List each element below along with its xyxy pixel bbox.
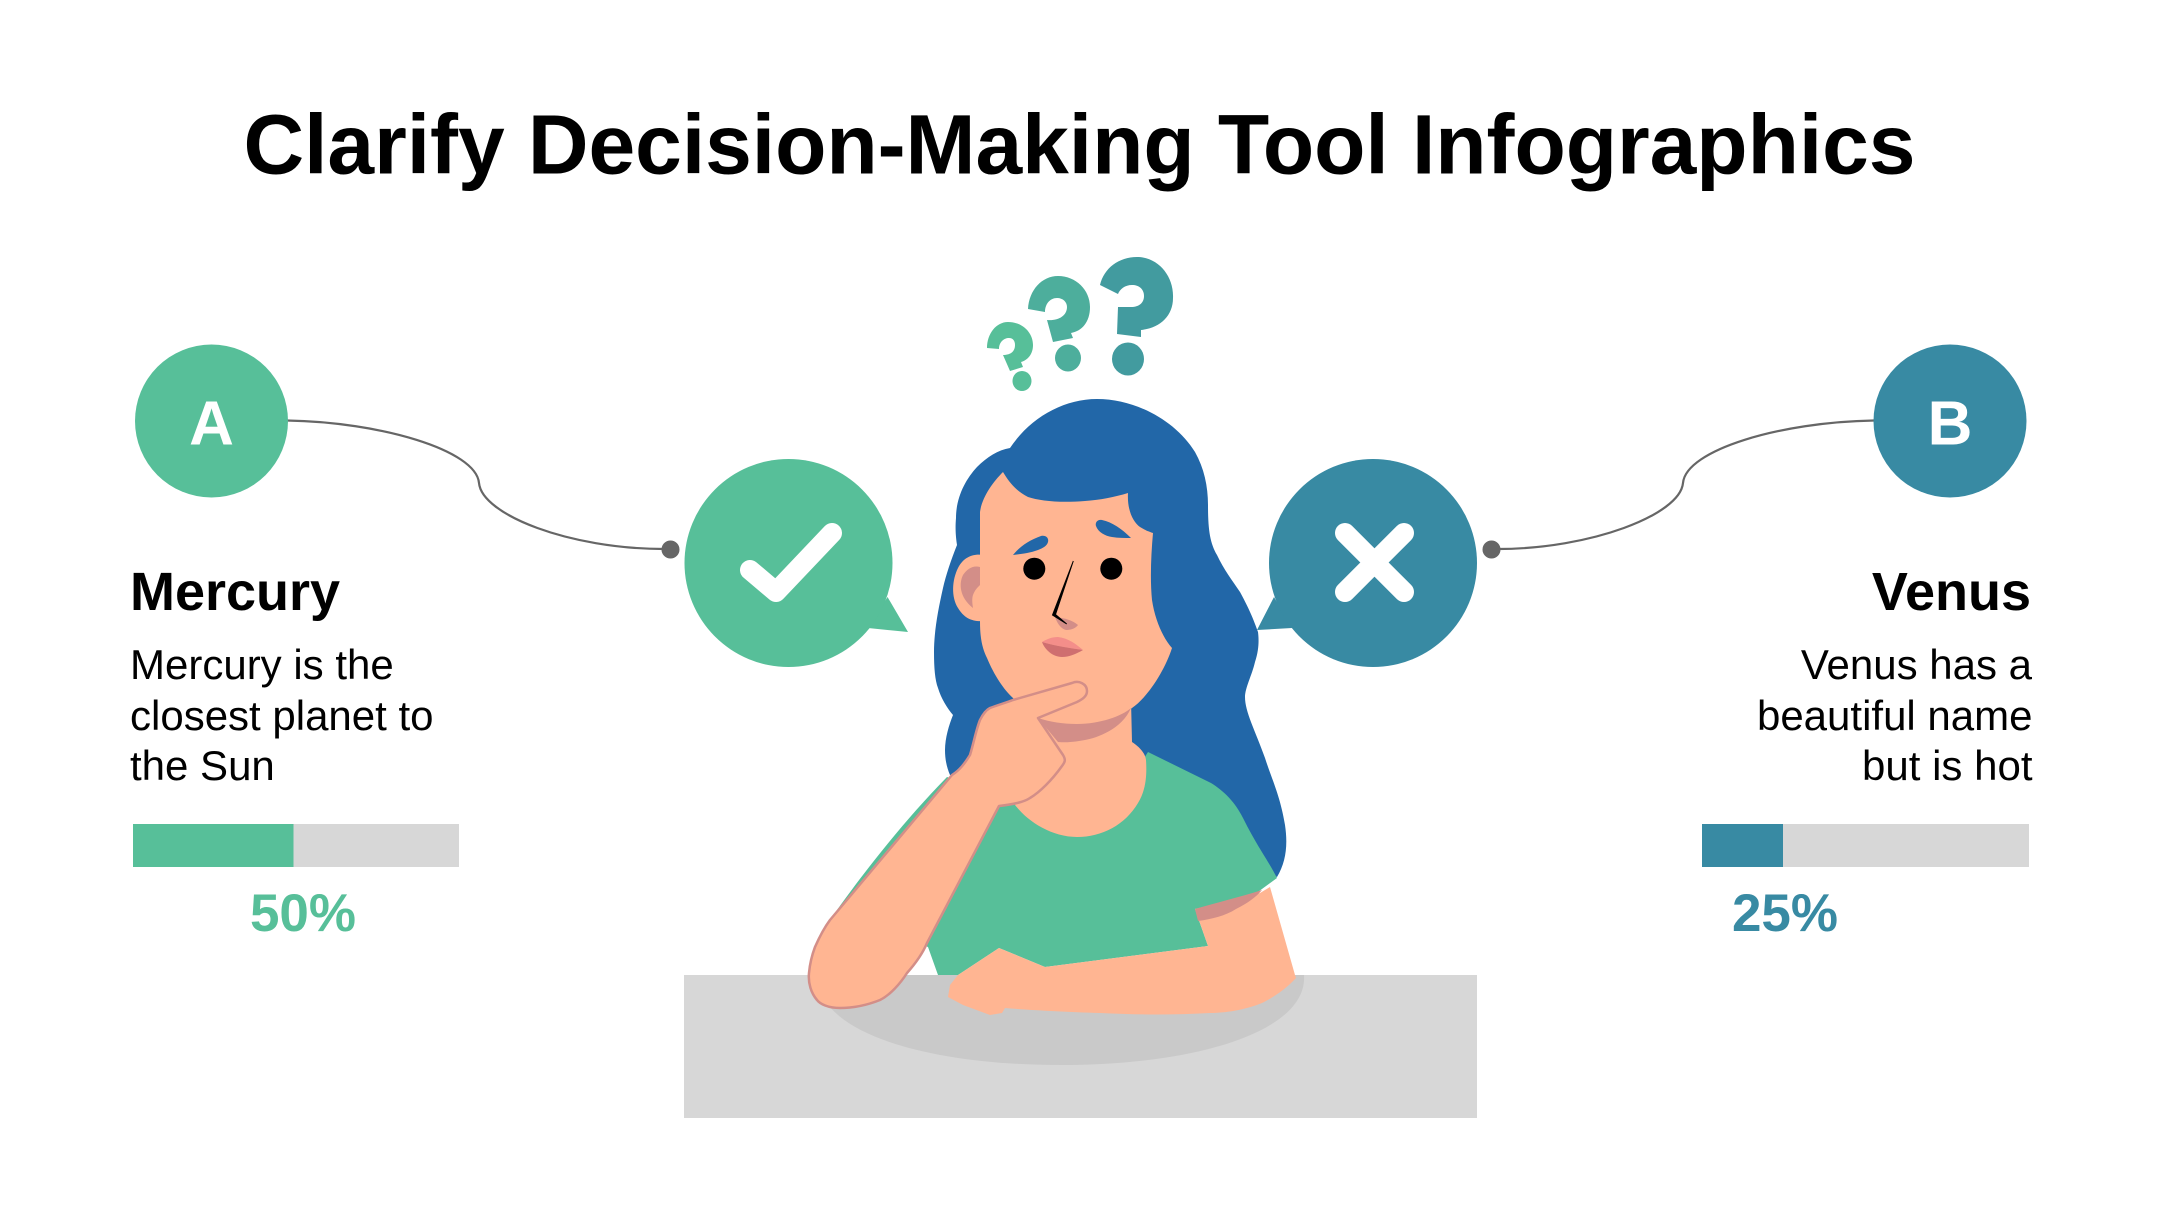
text: Venus description: but is hot: [1862, 742, 2033, 789]
connector line A: [287, 420, 680, 558]
character: thinking woman: [809, 399, 1296, 1015]
icon: teal speech bubble with cross: [1257, 459, 1477, 667]
ear: [953, 555, 984, 621]
connector line B: [1482, 420, 1874, 558]
t-shirt: [837, 752, 1277, 975]
value: 50%: 50%: [250, 884, 356, 943]
face: [980, 472, 1172, 723]
lips: [1042, 637, 1083, 657]
medium question mark: [1028, 276, 1090, 372]
panel: option A: [130, 344, 680, 943]
badge B: [1874, 344, 2026, 498]
badge A: [135, 344, 288, 498]
text: Venus description: Venus has a: [1801, 641, 2033, 688]
neck: [1015, 700, 1146, 837]
chin shadow: [1038, 708, 1131, 742]
hair: [934, 399, 1286, 877]
text: Venus description: beautiful name: [1757, 692, 2032, 739]
text: Mercury description: the Sun: [130, 742, 275, 789]
badge B: B: [1928, 390, 1972, 458]
panel: option B: [1482, 344, 2033, 943]
eyebrows: [1013, 520, 1131, 555]
badge A: A: [189, 390, 234, 458]
text: Mercury description: Mercury is the: [130, 641, 394, 688]
nose shadow: [1055, 617, 1078, 630]
large question mark: [1100, 257, 1173, 376]
near arm with hand on chin: [809, 682, 1087, 1008]
icon: green speech bubble with check: [684, 459, 908, 667]
sleeve shadow: [1195, 890, 1262, 921]
title: Clarify Decision-Making Tool Infographics: [244, 98, 1916, 192]
progress bar 25%: [1702, 824, 2029, 867]
far arm: [948, 887, 1296, 1015]
small question mark: [987, 322, 1033, 391]
table: [684, 975, 1477, 1118]
inner ear: [961, 566, 980, 608]
nose line: [1052, 561, 1073, 624]
progress bar 50%: [133, 824, 459, 867]
text: Mercury description: closest planet to: [130, 692, 434, 739]
value: 25%: 25%: [1732, 884, 1838, 943]
heading: Venus: Venus: [1872, 562, 2031, 622]
eyes: [1023, 558, 1122, 580]
icon: question marks: [987, 257, 1173, 391]
heading: Mercury: Mercury: [130, 562, 340, 622]
